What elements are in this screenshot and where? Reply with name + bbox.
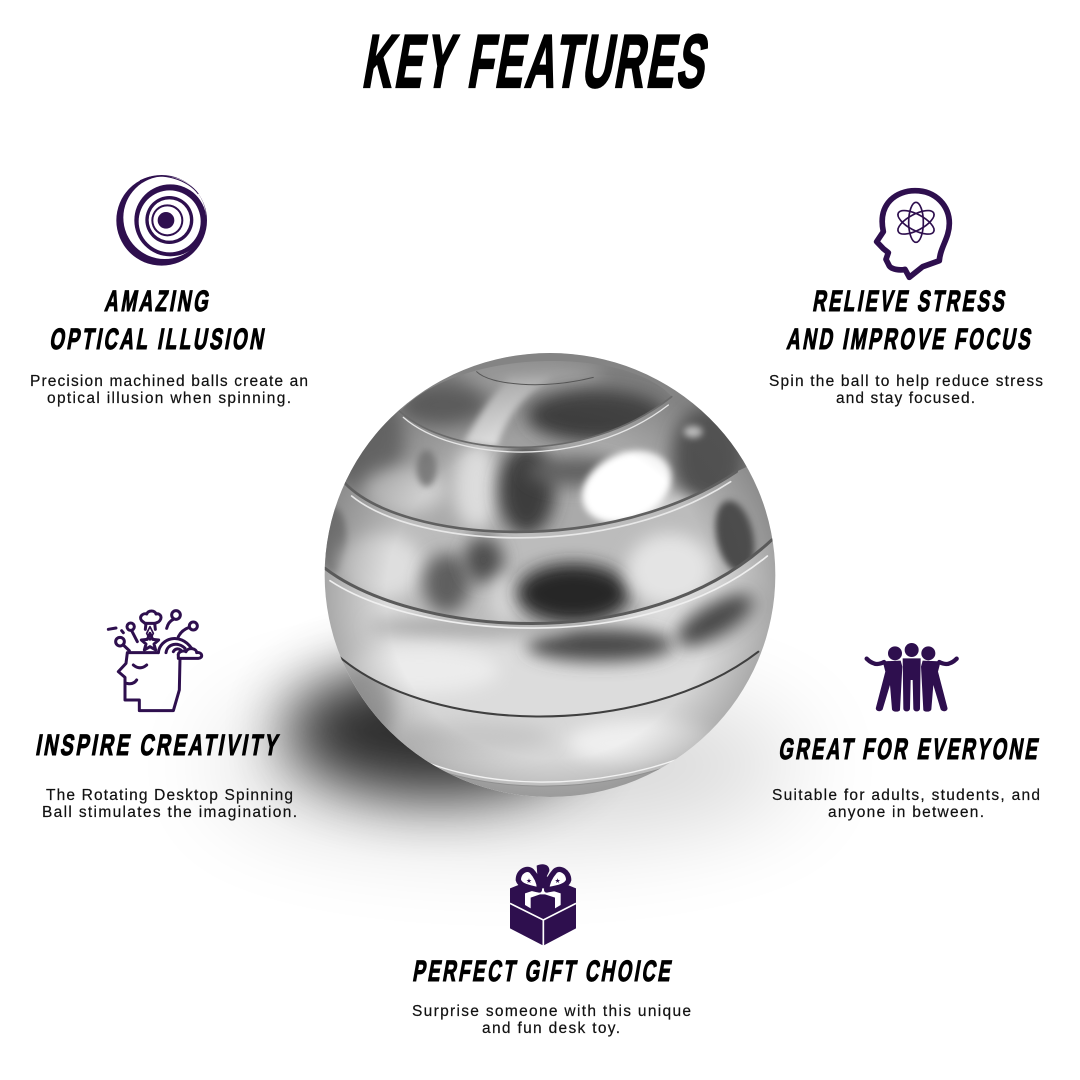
icon: group of people [867,643,957,712]
description [42,787,297,821]
lower band reflections [325,542,775,716]
heading [48,285,270,356]
description [30,373,308,407]
description [412,1003,691,1037]
description: Suitable for adults, students, and [772,787,1040,804]
panel: relieve stress [769,191,1043,407]
machined grooves [325,372,772,786]
description: Surprise someone with this unique [412,1003,691,1020]
icon: gift box: ★ [555,877,561,885]
description [772,787,1040,821]
heading: OPTICAL ILLUSION [48,323,270,356]
panel: amazing optical illusion [30,175,308,407]
heading: AMAZING [103,285,215,318]
icon: head with ideas [108,611,202,711]
description [769,373,1043,407]
panel: inspire creativity [34,611,297,821]
description: Spin the ball to help reduce stress [769,373,1043,390]
description: Precision machined balls create an [30,373,308,390]
description: The Rotating Desktop Spinning [46,787,293,804]
icon: gift box: ★ [526,877,532,885]
edge shading [325,353,775,797]
heading: INSPIRE CREATIVITY [34,729,284,762]
description: and fun desk toy. [482,1020,620,1037]
drop shadow of the ball [220,664,800,833]
description: and stay focused. [836,390,975,407]
heading: PERFECT GIFT CHOICE [411,955,677,988]
panel: perfect gift choice [411,864,691,1037]
icon: head with atom [877,191,949,277]
upper band reflections [345,353,747,530]
description: Ball stimulates the imagination. [42,804,297,821]
description: anyone in between. [828,804,984,821]
icon: gift box [510,864,576,946]
panel: great for everyone [772,643,1044,821]
metal spinning ball [324,353,776,797]
icon: spiral [116,175,207,266]
heading [785,285,1037,356]
top cap reflections [402,361,670,446]
description: optical illusion when spinning. [47,390,291,407]
title: KEY FEATURES [358,21,717,104]
bottom band reflections [345,650,762,797]
middle band reflections [324,467,772,622]
